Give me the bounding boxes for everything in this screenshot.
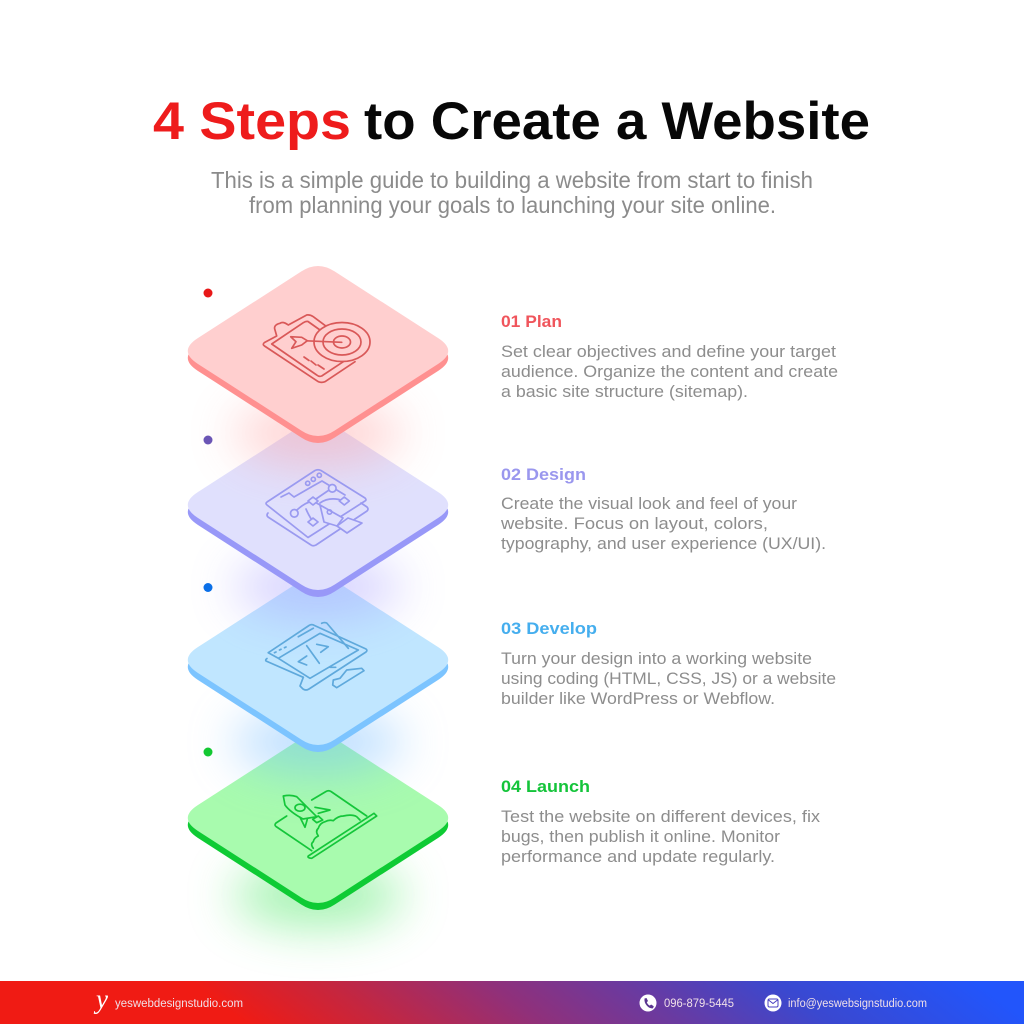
subtitle (211, 167, 813, 218)
platform edge: develop (188, 582, 448, 752)
glow: develop (233, 712, 403, 772)
glow: plan (233, 403, 403, 463)
text block: 01 plan (501, 312, 838, 401)
platform edge: launch (188, 740, 448, 910)
text block: 02 design: website. Focus on layout, colors, (500, 514, 768, 533)
text block: 01 plan: 01 Plan (501, 312, 562, 331)
icon: clipboard and target (263, 315, 370, 382)
footer bar (0, 981, 1024, 1024)
platform edge: design (188, 427, 448, 597)
subtitle: This is a simple guide to building a website from start to finish (211, 167, 813, 193)
platform face: develop (188, 575, 448, 745)
text block: 01 plan: a basic site structure (sitemap). (501, 382, 748, 401)
icon: code window (266, 623, 367, 690)
step 2 platform: design (188, 420, 448, 597)
platform edge: plan (188, 273, 448, 443)
text block: 04 launch: Test the website on different devices, fix (501, 807, 821, 826)
title: to Create a Website (364, 92, 870, 151)
title: 4 Steps (153, 92, 351, 151)
footer logo: y (93, 984, 108, 1014)
text block: 02 design: 02 Design (501, 465, 586, 484)
step 3 platform: develop (188, 575, 448, 752)
text block: 02 design (500, 465, 826, 553)
text block: 01 plan: audience. Organize the content and create (501, 362, 838, 381)
icon: phone (640, 994, 656, 1012)
subtitle: from planning your goals to launching your site online. (249, 192, 776, 218)
text block: 04 launch: 04 Launch (501, 777, 590, 796)
glow: launch (233, 863, 403, 927)
icon: vector design window (266, 470, 368, 546)
text block: 03 develop: Turn your design into a working website (501, 649, 812, 668)
text block: 03 develop: using coding (HTML, CSS, JS) or a website (501, 669, 836, 688)
text block: 04 launch: performance and update regularly. (501, 847, 775, 866)
step 4 platform: launch (188, 733, 448, 927)
platform face: plan (188, 266, 448, 436)
marker dots (204, 288, 212, 756)
text block: 03 develop: builder like WordPress or Webflow. (501, 689, 775, 708)
footer email: info@yeswebsignstudio.com (788, 998, 927, 1010)
footer phone number: 096-879-5445 (664, 998, 734, 1010)
text block: 02 design: typography, and user experience (UX/UI). (501, 534, 826, 553)
glow: design (233, 557, 403, 617)
step 1 platform: plan (188, 266, 448, 443)
text block: 01 plan: Set clear objectives and define your target (501, 342, 836, 361)
platform face: design (188, 420, 448, 590)
text block: 04 launch: bugs, then publish it online. Monitor (501, 827, 780, 846)
text block: 03 develop (501, 619, 836, 708)
text block: 04 launch (501, 777, 821, 866)
platform face: launch (188, 733, 448, 903)
icon: mail (764, 994, 782, 1012)
title (153, 92, 870, 151)
text block: 03 develop: 03 Develop (501, 619, 597, 638)
footer website: yeswebdesignstudio.com (115, 998, 243, 1010)
text block: 02 design: Create the visual look and feel of your (501, 494, 797, 513)
icon: rocket launch (275, 791, 377, 858)
